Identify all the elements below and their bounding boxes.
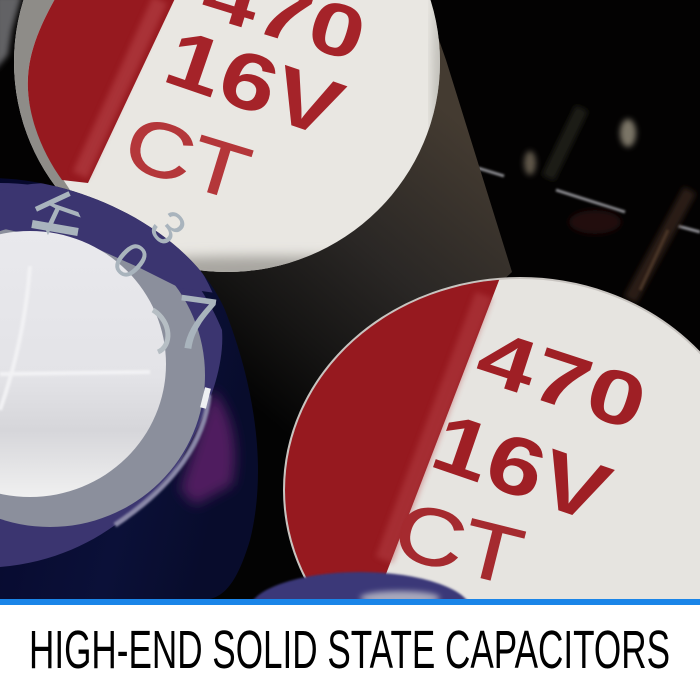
marking: CT lower: CT [386, 485, 532, 602]
white centre [0, 231, 166, 497]
capacitor top: lower [283, 277, 700, 599]
background circuit board details [478, 108, 700, 300]
printed label: blue cap: 3 [139, 201, 196, 256]
marking: CT upper: CT [115, 100, 259, 218]
printed label: blue cap: K [22, 183, 92, 241]
marking: 470 lower: 470 [467, 313, 657, 447]
grey component top-left [0, 0, 22, 70]
capacitor: blue bottom [252, 570, 468, 599]
grey rim: upper [14, 0, 70, 190]
magenta reflection [180, 390, 235, 505]
blue divider bar [0, 599, 700, 605]
red stripe: upper [28, 0, 179, 183]
capacitor top: upper [14, 0, 440, 272]
caption band [0, 605, 700, 700]
purple ring [0, 183, 222, 567]
printed label: blue cap: 0 [102, 231, 160, 291]
centre vent cross [0, 266, 150, 410]
marking: 16V upper: 16V [154, 12, 354, 155]
light streak [115, 395, 209, 525]
red stripe: lower [285, 280, 500, 578]
capacitor: blue left [0, 178, 258, 600]
printed label: blue cap: 7 [169, 279, 222, 369]
marking: 16V lower: 16V [421, 396, 621, 541]
grey inner ring [0, 183, 212, 527]
printed label: blue cap [34, 191, 216, 349]
capacitor body: upper [200, 39, 512, 402]
